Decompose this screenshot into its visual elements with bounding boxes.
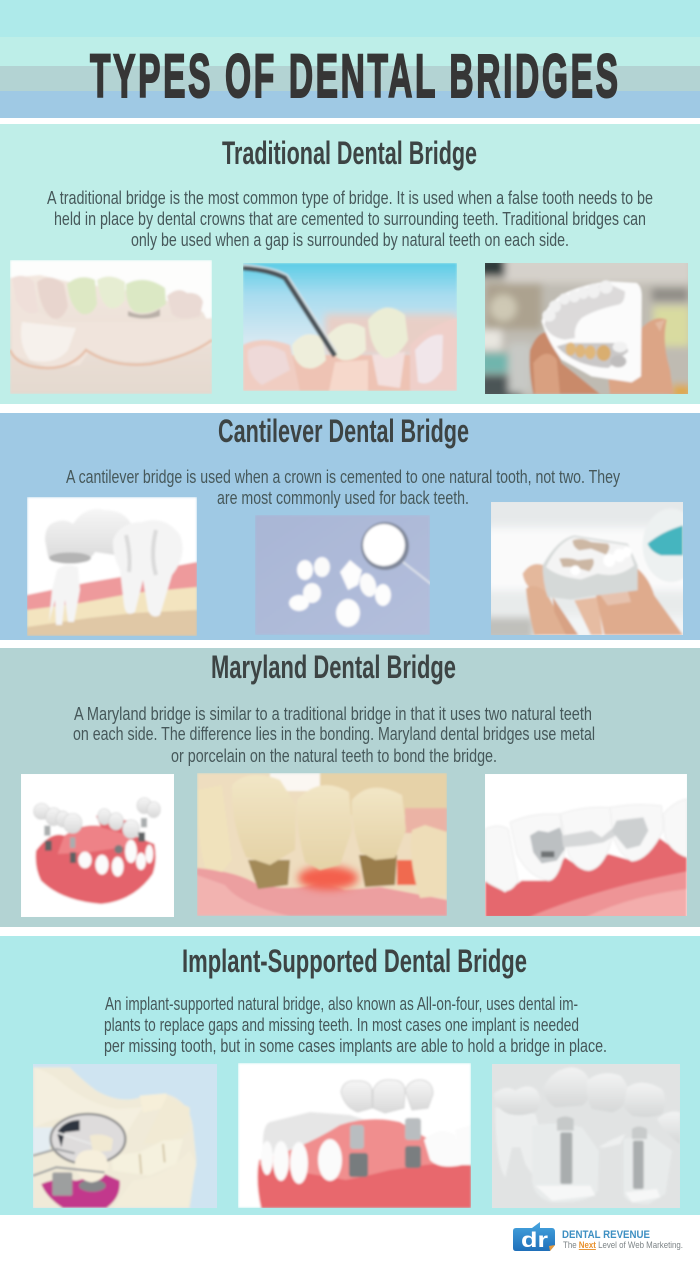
logo: dental revenue: [513, 1222, 683, 1252]
heading: cantilever: Cantilever Dental Bridge: [218, 413, 469, 449]
logo wordmark: The Next Level of Web Marketing.: [563, 1240, 683, 1251]
text block: implant-supported description: [104, 994, 607, 1056]
header banner: [0, 0, 700, 118]
icon: dr speech bubble: [513, 1222, 555, 1252]
icon: dr speech bubble: dr: [521, 1229, 548, 1252]
text block: maryland description: [73, 704, 595, 766]
logo wordmark: [562, 1229, 683, 1251]
text block: maryland description: A Maryland bridge is similar to a traditional bridge in that it uses two natural teeth: [74, 704, 592, 724]
panel: cantilever dental bridge: [0, 413, 700, 642]
panel: traditional dental bridge: [0, 124, 700, 404]
image: full arch with implants: [19, 772, 176, 919]
image: plaster arch with mirror and implants: [31, 1062, 220, 1211]
text block: cantilever description: are most commonly used for back teeth.: [217, 488, 469, 508]
image: hand holding plaster mould: [485, 263, 688, 394]
title: TYPES OF DENTAL BRIDGES: [90, 42, 618, 111]
image: tweezers holding a bridge: [243, 263, 457, 391]
panel: implant-supported dental bridge: [0, 936, 700, 1215]
text block: traditional description: only be used when a gap is surrounded by natural teeth on each side.: [131, 230, 569, 250]
logo wordmark: DENTAL REVENUE: [562, 1229, 650, 1241]
image: maryland bridge metal wings: [483, 772, 688, 917]
image: plaster model with green crowns: [10, 260, 212, 394]
image: veneers and dental mirror: [255, 515, 431, 635]
heading: maryland: Maryland Dental Bridge: [211, 649, 456, 685]
image: cantilever tooth illustration: [27, 497, 197, 636]
image: transparent implant illustration: [490, 1062, 682, 1211]
image: implant bridge over gum: [238, 1063, 471, 1208]
text block: traditional description: [47, 188, 653, 250]
image: close-up bridge on gums: [197, 773, 447, 916]
text block: maryland description: or porcelain on the natural teeth to bond the bridge.: [171, 746, 497, 766]
panel: maryland dental bridge: [0, 648, 700, 927]
text block: cantilever description: [66, 467, 620, 508]
heading: traditional: Traditional Dental Bridge: [222, 135, 477, 171]
heading: implant-supported: Implant-Supported Dental Bridge: [182, 943, 527, 979]
image: hand holding dental model: [491, 502, 683, 635]
